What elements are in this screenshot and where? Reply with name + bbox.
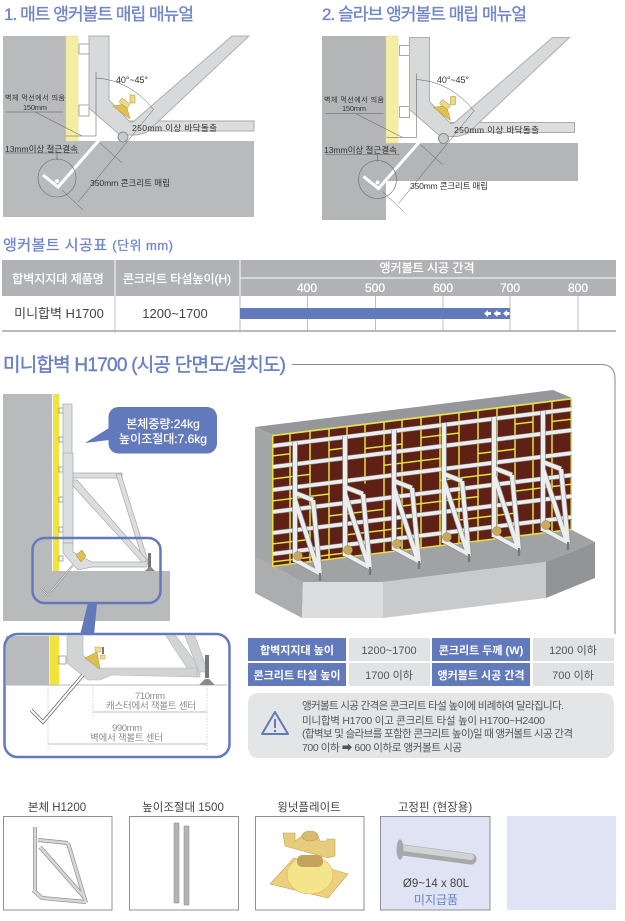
notice text <box>302 699 573 754</box>
spec row 1: 콘크리트 두께 (W) <box>439 643 524 657</box>
table: anchor bolt spacing: 800 <box>568 281 588 295</box>
table: anchor bolt spacing: 400 <box>297 281 317 295</box>
table header <box>2 260 616 296</box>
zoom connector <box>80 603 97 635</box>
dimension labels: 990mm <box>112 723 142 734</box>
part: fixing pin: 고정핀 (현장용) <box>398 801 472 814</box>
jack bolt <box>205 655 209 678</box>
grid lines <box>115 296 578 333</box>
dimension labels <box>324 75 539 191</box>
concrete <box>6 636 49 685</box>
spec row 2: 콘크리트 타설 높이 <box>253 669 341 682</box>
dimension labels: 250mm 이상 바닥돌출 <box>454 125 539 135</box>
gusset <box>76 550 86 562</box>
anchor <box>41 565 73 595</box>
base slab top <box>255 530 595 582</box>
dimension labels: 13mm이상 철근결속 <box>5 144 78 154</box>
table: anchor bolt spacing: 콘크리트 타설높이(H) <box>123 272 231 286</box>
heading: slab anchor bolt manual: 2. 슬라브 앵커볼트 매립 매뉴얼 <box>322 5 527 24</box>
spec table <box>248 638 614 686</box>
table: anchor bolt spacing <box>2 260 616 333</box>
table row: 1200~1700 <box>142 306 208 321</box>
spec row 2: 앵커볼트 시공 간격 <box>437 669 525 682</box>
brace 5 <box>492 417 519 556</box>
brace 3 <box>392 430 419 569</box>
heading: anchor bolt table: 앵커볼트 시공표 (단위 mm) <box>3 237 173 254</box>
spec row 2: 1700 이하 <box>365 668 413 682</box>
part: fixing pin: Ø9~14 x 80L <box>403 878 470 890</box>
part: height adjuster: 높이조절대 1500 <box>142 800 224 814</box>
base left face <box>255 557 303 618</box>
notice text: 700 이하 ➡ 600 이하로 앵커볼트 시공 <box>302 741 462 754</box>
base right face <box>546 542 595 598</box>
icon: warning triangle <box>262 712 288 734</box>
anchor <box>31 675 83 722</box>
brace 6 <box>542 411 568 550</box>
yellow form panel <box>386 36 398 143</box>
floor line <box>6 684 227 686</box>
yellow form panel <box>53 394 59 571</box>
spec row 1: 1200 이하 <box>549 643 597 657</box>
highlight frame <box>32 538 160 603</box>
spec row 1: 1200~1700 <box>361 645 417 657</box>
spec row 1: 합벽지지대 높이 <box>260 643 334 657</box>
spec row 2 <box>248 663 614 686</box>
illustration: 3D formwork wall <box>255 390 595 618</box>
concrete wall and mat <box>3 36 254 217</box>
table: anchor bolt spacing: 700 <box>500 281 520 295</box>
notice text: 앵커볼트 시공 간격은 콘크리트 타설 높이에 비례하여 달라집니다. <box>302 699 564 712</box>
panels <box>272 398 572 567</box>
part: wing nut plate <box>256 801 364 910</box>
part: fixing pin: 미지급품 <box>414 893 458 907</box>
notice text: (합벽보 및 슬라브를 포함한 콘크리트 높이)일 때 앵커볼트 시공 간격 <box>302 727 573 740</box>
dimension labels: 250mm 이상 바닥돌출 <box>132 123 217 133</box>
spec row 2: 700 이하 <box>552 668 594 682</box>
diagram: mat anchor bolt <box>3 36 254 217</box>
table: anchor bolt spacing: 합벽지지대 제품명 <box>12 272 104 286</box>
dimension labels <box>5 75 217 188</box>
dimension lines <box>48 685 207 750</box>
part: height adjuster <box>130 800 238 910</box>
dimension labels: 150mm <box>342 104 366 113</box>
panel: detail zoom <box>4 634 230 757</box>
brace 2 <box>344 436 370 575</box>
brace 1 <box>294 442 320 581</box>
dimension labels: 벽체 먹선에서 띄움 <box>5 93 66 102</box>
wing nut plate <box>85 647 105 669</box>
callout: notice <box>248 693 614 758</box>
table row <box>14 306 208 321</box>
jack bolt <box>148 553 151 568</box>
table: anchor bolt spacing: 600 <box>433 281 453 295</box>
dimension labels: 710mm <box>135 691 165 702</box>
diagram: slab anchor bolt <box>322 36 578 220</box>
frame and anchor detail <box>5 36 254 210</box>
base front face light <box>302 582 383 618</box>
dimension labels: 350mm 콘크리트 매립 <box>90 178 170 188</box>
spacing bar <box>240 308 510 319</box>
concrete wall and slab <box>322 36 578 220</box>
tie box <box>59 656 66 664</box>
table: anchor bolt spacing: 500 <box>365 281 385 295</box>
wall top <box>255 390 572 435</box>
tie boxes <box>59 408 63 561</box>
notice text: 미니합벽 H1700 이고 콘크리트 타설 높이 H1700~H2400 <box>302 715 545 727</box>
part: wing nut plate: 윙넛플레이트 <box>277 801 341 814</box>
callout: weight <box>85 407 217 454</box>
yellow form <box>50 636 59 685</box>
dimension labels: 벽체 먹선에서 띄움 <box>324 95 385 104</box>
frame parts <box>67 636 208 680</box>
brace 4 <box>442 423 469 562</box>
yellow form panel <box>66 36 78 141</box>
callout: weight: 본체중량:24kg <box>126 417 200 431</box>
dimension labels: 40°~45° <box>437 75 469 85</box>
dimension labels: 13mm이상 철근결속 <box>324 145 397 155</box>
dimension labels: 150mm <box>23 103 47 112</box>
empty tinted box <box>507 816 616 910</box>
dimension labels: 40°~45° <box>116 75 148 85</box>
base front face <box>383 562 546 618</box>
arrows on bar <box>484 310 510 317</box>
table: anchor bolt spacing: 앵커볼트 시공 간격 <box>380 261 474 275</box>
detail background <box>4 634 230 757</box>
dimension labels: 캐스터에서 잭볼트 센터 <box>106 701 196 712</box>
support frame <box>63 404 149 570</box>
callout: weight: 높이조절대:7.6kg <box>119 432 207 446</box>
diagram: cross section <box>3 394 170 621</box>
dimension labels <box>90 691 196 744</box>
detail border <box>4 634 230 757</box>
frame and anchor detail <box>326 38 574 212</box>
table row: 미니합벽 H1700 <box>14 306 104 321</box>
part: fixing pin <box>380 801 490 910</box>
dimension labels: 350mm 콘크리트 매립 <box>410 181 488 191</box>
wall side <box>255 427 272 566</box>
spec row 1 <box>248 638 614 661</box>
part: body H1200 <box>4 801 112 910</box>
heading: mat anchor bolt manual: 1. 매트 앵커볼트 매립 매뉴얼 <box>4 5 194 24</box>
concrete wall and floor <box>3 394 170 621</box>
heading: cross section: 미니합벽 H1700 (시공 단면도/설치도) <box>3 354 286 376</box>
walers <box>273 409 572 554</box>
part: body H1200: 본체 H1200 <box>28 801 86 814</box>
dimension labels: 벽에서 잭볼트 센터 <box>90 733 163 744</box>
